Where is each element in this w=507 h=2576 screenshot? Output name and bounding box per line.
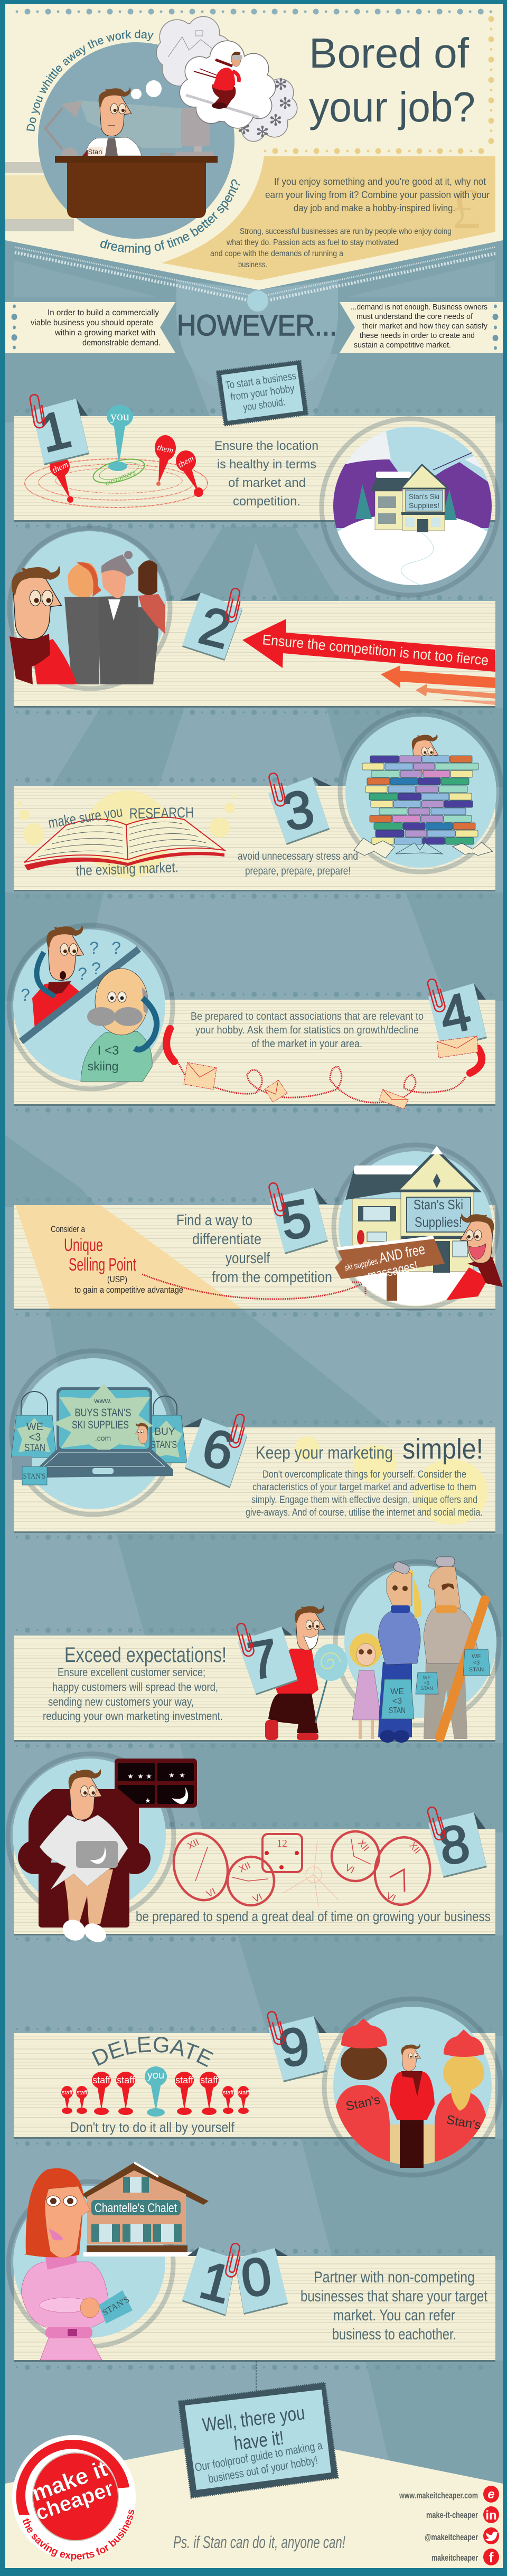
handset right: [470, 1048, 482, 1073]
stamp: well there you have it: [179, 2383, 338, 2498]
clock 1: [166, 1827, 235, 1906]
intro text: [265, 176, 490, 213]
staff member: left: [336, 2085, 390, 2162]
wooden sign: AND free: [378, 1240, 426, 1266]
step 7 text: Ensure excellent customer service;: [58, 1666, 205, 1679]
note: step 6: 6: [197, 1417, 240, 1482]
watermark: pound signs: £: [452, 176, 481, 241]
footer cream panel: [5, 2434, 503, 2568]
second intro text: Strong, successful businesses are run by people who enjoy doing: [240, 227, 452, 236]
logo: [12, 2435, 136, 2561]
second intro text: and cope with the demands of running a: [210, 249, 343, 258]
note: step 9: 9: [275, 2016, 314, 2079]
step 5 text: differentiate: [192, 1231, 261, 1248]
ribbon right: [340, 302, 503, 353]
character: Stan red scarf: [10, 565, 77, 684]
arrows: competition: [242, 619, 495, 705]
note: step 7: [236, 1622, 298, 1695]
step 3 caption: existing market: the existing market.: [76, 859, 179, 879]
yellow spots: [295, 1436, 488, 1525]
brochure stack: [12, 1456, 47, 1485]
clocks: [166, 1827, 434, 1909]
cloud: snowflakes: [237, 73, 297, 141]
staff member: right: [435, 2093, 486, 2162]
logo: make it: [29, 2456, 111, 2506]
stamp: well there you have it: business out of your hobby!: [207, 2453, 319, 2486]
pin: them middle: them: [156, 443, 174, 455]
step 4 text: [191, 1011, 424, 1050]
step 1 rings and pins: [25, 405, 208, 507]
character: Chantelle: [21, 2168, 133, 2360]
shop building: Supplies!: [415, 1214, 462, 1230]
stamp: to start a business: from your hobby: [230, 383, 295, 403]
sweater text: I <3: [98, 1043, 119, 1058]
stamp: to start a business: [217, 361, 308, 426]
ribbon right text: ...demand is not enough. Business owners: [351, 303, 487, 312]
ribbon left text: [31, 308, 161, 347]
contact: twitter: @makeitcheaper: [425, 2532, 478, 2542]
scene: working at night: [8, 1754, 197, 1946]
ribbon left text: In order to build a commercially: [48, 308, 159, 317]
sweater text: skiing: [88, 1059, 118, 1073]
note: step 2: 2: [194, 596, 237, 660]
clock 1: VI: [205, 1886, 218, 1900]
scene: massages sign and shop: [334, 1145, 503, 1309]
clock 5: VI: [343, 1862, 356, 1876]
laptop: www.: [93, 1396, 112, 1405]
scene: Chantelle's Chalet: [8, 2163, 209, 2360]
question marks: ?: [21, 985, 30, 1004]
pins: staff and you: you: [147, 2070, 164, 2081]
note: step 6: [184, 1413, 247, 1488]
clock 6: XII: [407, 1840, 423, 1856]
pins: staff and you: staff: [200, 2075, 219, 2085]
pin: you: [107, 405, 133, 471]
step 7 text: sending new customers your way,: [48, 1695, 194, 1708]
step 5 text: [176, 1212, 332, 1286]
illustration: open book: [17, 791, 237, 878]
contact: linkedin: [426, 2506, 499, 2523]
step 6 text: Don't overcomplicate things for yourself. Consider the: [262, 1469, 466, 1480]
shopping bags: STAN: [389, 1706, 406, 1715]
pin: them left: [50, 456, 73, 503]
clock 1: XII: [186, 1837, 201, 1851]
pin: you: you: [110, 410, 129, 424]
bag left: [11, 1392, 57, 1458]
pins: staff and you: staff: [62, 2090, 73, 2096]
step 10 text: market. You can refer: [333, 2307, 455, 2324]
step 3 heading: make sure you: [47, 803, 124, 831]
step 3 text: avoid unnecessary stress and: [238, 850, 358, 862]
loyalty card: STAN'S: [100, 2294, 131, 2318]
pins: staff and you: staff: [223, 2090, 234, 2096]
monitor beam: [79, 100, 182, 148]
bag right: STAN'S: [151, 1440, 177, 1451]
scene: ski shop: Supplies!: [409, 501, 439, 510]
ribbon left text: viable business you should operate: [31, 318, 153, 327]
handset left: [166, 1029, 174, 1061]
step 5 text: from the competition: [212, 1269, 332, 1286]
night window: ★: [179, 1771, 185, 1779]
note: step 1: 1: [33, 399, 76, 464]
usp text: Consider a: [51, 1224, 85, 1234]
intro text: If you enjoy something and you're good at it, why not: [274, 176, 486, 187]
step 5 text: Find a way to: [176, 1212, 252, 1229]
question marks: ?: [91, 959, 101, 978]
right dot border: [265, 19, 491, 151]
step 6 text: [246, 1469, 483, 1518]
scene: wall of books: [340, 710, 502, 872]
step 6 heading: [256, 1433, 483, 1465]
shopping bags: STAN: [420, 1686, 433, 1691]
shopping bags: <3: [424, 1680, 429, 1686]
step 10 text: [301, 2269, 488, 2343]
laptop: [39, 1384, 173, 1478]
intro text: day job and make a hobby-inspired living.: [294, 203, 455, 213]
step 1 text: is healthy in terms: [217, 457, 316, 472]
laptop: .com: [95, 1434, 111, 1442]
small Stan on laptop: [135, 1423, 148, 1444]
ribbon right text: sustain a competitive market.: [354, 341, 451, 350]
however collar: [14, 247, 495, 396]
usp text: [51, 1224, 183, 1295]
cloud: skier: [180, 41, 275, 128]
wooden sign: ski supplies: [344, 1257, 379, 1273]
step 6 text: characteristics of your target market and advertise to them: [252, 1482, 476, 1493]
note: step 9: [267, 2010, 327, 2082]
step 4 text: Be prepared to contact associations that are relevant to: [191, 1011, 424, 1022]
scene: phone call: [9, 925, 173, 1089]
arrows: competition: Ensure the competition is not too fierce: [261, 632, 489, 669]
night window: ★: [168, 1771, 175, 1779]
note: step 3: 3: [278, 778, 319, 842]
night window: [115, 1759, 197, 1808]
contact: website: www.makeitcheaper.com: [399, 2490, 478, 2500]
step 10 text: Partner with non-competing: [314, 2269, 475, 2286]
character: Stan bored: [99, 87, 132, 136]
clock 2: VI: [251, 1891, 264, 1905]
character: mother: [378, 1560, 421, 1743]
note: step 10: 0: [238, 2246, 275, 2309]
character: happy Stan: [446, 1213, 503, 1300]
robin: [357, 1230, 364, 1245]
dropped books: [354, 838, 493, 858]
cloud: snowflakes: ✻: [237, 120, 251, 138]
note: step 3: [268, 772, 331, 845]
contact: website: e: [487, 2487, 495, 2502]
step 1 text: competition.: [233, 494, 301, 509]
second intro text: [210, 227, 452, 269]
night window: ★: [146, 1772, 152, 1780]
usp text: Unique: [64, 1235, 103, 1255]
lamp: [45, 100, 82, 156]
title: [309, 30, 475, 130]
ribbon left text: within a growing market with: [54, 328, 155, 337]
step 1 text: Ensure the location: [214, 439, 318, 453]
character: Stan laughing: [390, 2044, 435, 2168]
cloud: snowflakes: ✻: [256, 124, 269, 141]
shopping bags: STAN: [469, 1667, 484, 1673]
pins: staff and you: staff: [238, 2090, 249, 2096]
computer monitor: [160, 108, 213, 156]
character: Stan with lollipop: [265, 1605, 348, 1740]
step 4 text: of the market in your area.: [251, 1038, 362, 1050]
staff member: right: Stan's: [445, 2112, 482, 2133]
ribbon right text: must understand the core needs of: [356, 312, 473, 321]
character: man with beanie: [97, 551, 138, 684]
ribbon left text: demonstrable demand.: [82, 339, 161, 347]
step 3 heading: [47, 803, 194, 831]
note: step 4: 4: [435, 982, 476, 1046]
character: father with ski: [424, 1557, 485, 1739]
wooden sign: massages!: [367, 1258, 419, 1283]
hero circle: [38, 42, 234, 239]
step 9 text: Don't try to do it all by yourself: [70, 2119, 235, 2135]
pins: staff and you: staff: [175, 2075, 194, 2085]
note: step 7: 7: [243, 1628, 283, 1691]
night window: ★: [145, 1797, 151, 1804]
contact: twitter: [425, 2527, 499, 2544]
logo: the saving experts for business: [23, 2509, 134, 2561]
hanging string: [256, 2361, 257, 2392]
step 3 text: prepare, prepare, prepare!: [245, 865, 351, 877]
character: Stan on phone: [32, 925, 84, 1030]
stamp: to start a business: To start a business: [224, 370, 297, 392]
title: Bored of: [309, 30, 470, 77]
step 3 heading: RESEARCH: [129, 804, 194, 822]
cloud: snowflakes: ✻: [278, 95, 292, 112]
step 1 text: of market and: [228, 476, 306, 490]
shopping bags: WE: [423, 1675, 430, 1680]
pins: staff and you: staff: [92, 2075, 111, 2085]
delegate heading: DELEGATE: [92, 2036, 213, 2067]
however heading: HOWEVER...: [177, 308, 337, 342]
thought clouds: [131, 17, 297, 141]
clock 5: XII: [356, 1837, 372, 1853]
pin: them right: [176, 450, 203, 497]
clock 6: VI: [384, 1890, 397, 1904]
note: step 10: [182, 2243, 288, 2316]
bag right: [149, 1396, 187, 1463]
dotted arrow: [142, 1274, 365, 1299]
scene: customers: [265, 1557, 499, 1743]
bag left: STAN: [24, 1442, 45, 1454]
chalet: Chantelle's Chalet: [95, 2201, 177, 2215]
shopping bags: WE: [390, 1687, 404, 1696]
header cream panel: [5, 4, 503, 290]
clock 2: [228, 1857, 274, 1905]
pins: staff and you: staff: [77, 2090, 88, 2096]
step 1 text: [214, 439, 318, 509]
note: step 1: [29, 393, 89, 465]
loyalty card: [99, 2290, 133, 2324]
step 4 text: your hobby. Ask them for statistics on growth/decline: [195, 1024, 419, 1036]
second intro text: business.: [238, 260, 267, 269]
night window: ★: [127, 1772, 134, 1780]
usp text: to gain a competitive advantage: [74, 1285, 183, 1295]
chalet: [82, 2163, 209, 2257]
bag right: BUY: [154, 1426, 175, 1437]
shopping bags: <3: [473, 1660, 480, 1666]
pin: them left: them: [51, 460, 70, 475]
shop building: [345, 1146, 478, 1273]
pin: them right: them: [177, 454, 195, 470]
contact: linkedin: in: [485, 2508, 497, 2523]
staff member: left: Stan's: [344, 2092, 382, 2114]
note: step 5: [268, 1182, 328, 1254]
question marks: [21, 938, 121, 1004]
shopping bags: <3: [392, 1697, 402, 1706]
usp panel: [15, 1205, 242, 1309]
contact: website: [399, 2486, 499, 2503]
ribbon right text: these needs in order to create and: [360, 331, 475, 340]
ribbon right text: [351, 303, 487, 350]
clock 3: [262, 1834, 302, 1872]
ribbon left: [5, 302, 175, 353]
shirt and tie: Stan: [88, 148, 102, 156]
ring: customers: customers: [104, 468, 137, 488]
question marks: ?: [89, 938, 99, 957]
step 3 text: [238, 850, 358, 877]
contact: facebook: makeitcheaper: [431, 2553, 478, 2563]
note: step 8: 8: [435, 1813, 474, 1876]
note: step 8: [427, 1806, 487, 1878]
title: your job?: [309, 83, 475, 130]
ps note: Ps. if Stan can do it, anyone can!: [173, 2533, 345, 2552]
note: step 2: [180, 588, 242, 661]
character: Stan in robe: [40, 1769, 128, 1946]
stamp: well there you have it: Our foolproof guide to making a: [194, 2439, 324, 2474]
top dot border: [17, 8, 491, 15]
night window: ★: [137, 1772, 144, 1780]
shop building: Stan's Ski: [414, 1197, 463, 1212]
laptop: BUYS STAN'S: [75, 1407, 131, 1419]
character: bald man: [81, 969, 157, 1082]
curved text: dreaming: dreaming of time better spent?: [100, 180, 240, 255]
contact: linkedin: make-it-cheaper: [426, 2510, 478, 2520]
scene: laptop and bags: [11, 1351, 187, 1515]
clock 6: [371, 1834, 434, 1909]
shopping bags: [381, 1649, 490, 1719]
shirt and tie: [82, 137, 142, 156]
wooden sign: [335, 1236, 445, 1301]
pin: them middle: [155, 435, 176, 486]
curved text: do you whittle: Do you whittle away the work day: [26, 30, 154, 131]
step 6 heading: simple!: [402, 1433, 483, 1465]
character: man with scarf: [137, 560, 165, 684]
telephone cord with envelopes: [166, 1029, 482, 1109]
note: step 4: [427, 977, 487, 1050]
clock 3: 12: [277, 1838, 287, 1849]
envelopes: [184, 1036, 478, 1109]
character: Stan peeking: [412, 734, 438, 773]
book wall: [362, 756, 478, 844]
step 10 text: business to eachother.: [332, 2326, 456, 2343]
stamp: to start a business: you should:: [242, 396, 286, 413]
question marks: ?: [111, 938, 121, 957]
intro text: earn your living from it? Combine your passion with your: [265, 190, 490, 200]
pins: staff and you: [61, 2066, 249, 2117]
contact: facebook: [431, 2549, 499, 2565]
divider: [21, 949, 139, 1041]
scene: ski shop: [319, 416, 501, 598]
cloud: mountains: [157, 17, 231, 86]
cloud: snowflakes: ✻: [274, 76, 288, 93]
desk: [55, 156, 218, 218]
cloud: snowflakes: ✻: [269, 112, 283, 129]
usp text: (USP): [107, 1274, 127, 1284]
stamp: well there you have it: have it!: [233, 2427, 285, 2455]
clock 5: [332, 1831, 379, 1881]
pins: staff and you: staff: [117, 2075, 135, 2085]
logo: cheaper: [33, 2477, 117, 2525]
usp text: Selling Point: [69, 1255, 136, 1275]
panels and stitching: [14, 411, 495, 2367]
bag left: WE: [26, 1421, 43, 1433]
brochure stack: STAN'S: [23, 1472, 45, 1481]
step 7 text: reducing your own marketing investment.: [43, 1709, 223, 1723]
laptop: SKI SUPPLIES: [72, 1419, 129, 1431]
step 6 heading: Keep your marketing: [256, 1443, 393, 1462]
contact: facebook: f: [489, 2550, 494, 2565]
step 7 text: [43, 1643, 227, 1723]
shopping bags: WE: [472, 1653, 481, 1660]
second intro text: what they do. Passion acts as fuel to stay motivated: [226, 238, 398, 247]
scene: the competition: [10, 528, 170, 689]
step 7 text: Exceed expectations!: [64, 1643, 227, 1667]
stamp: well there you have it: Well, there you: [201, 2402, 306, 2436]
note: step 10: 1: [194, 2250, 238, 2315]
sweater text: [88, 1043, 119, 1073]
question marks: ?: [78, 964, 87, 983]
scene: the team: [324, 1999, 501, 2175]
step 5 text: yourself: [226, 1250, 270, 1267]
ring: customers: [91, 455, 147, 488]
tan intro panel: [162, 156, 495, 280]
scene: ski shop: Stan's Ski: [409, 492, 439, 501]
ribbon right text: their market and how they can satisfy: [362, 322, 487, 331]
step 7 text: happy customers will spread the word,: [52, 1680, 218, 1694]
armchair: [18, 1789, 151, 1928]
clock 2: XII: [237, 1860, 252, 1875]
bag left: <3: [29, 1432, 41, 1443]
clock 4 faded hands: [283, 1840, 338, 1906]
character: woman: [64, 562, 101, 684]
note: step 5: 5: [276, 1188, 315, 1251]
character: girl: [350, 1633, 381, 1739]
